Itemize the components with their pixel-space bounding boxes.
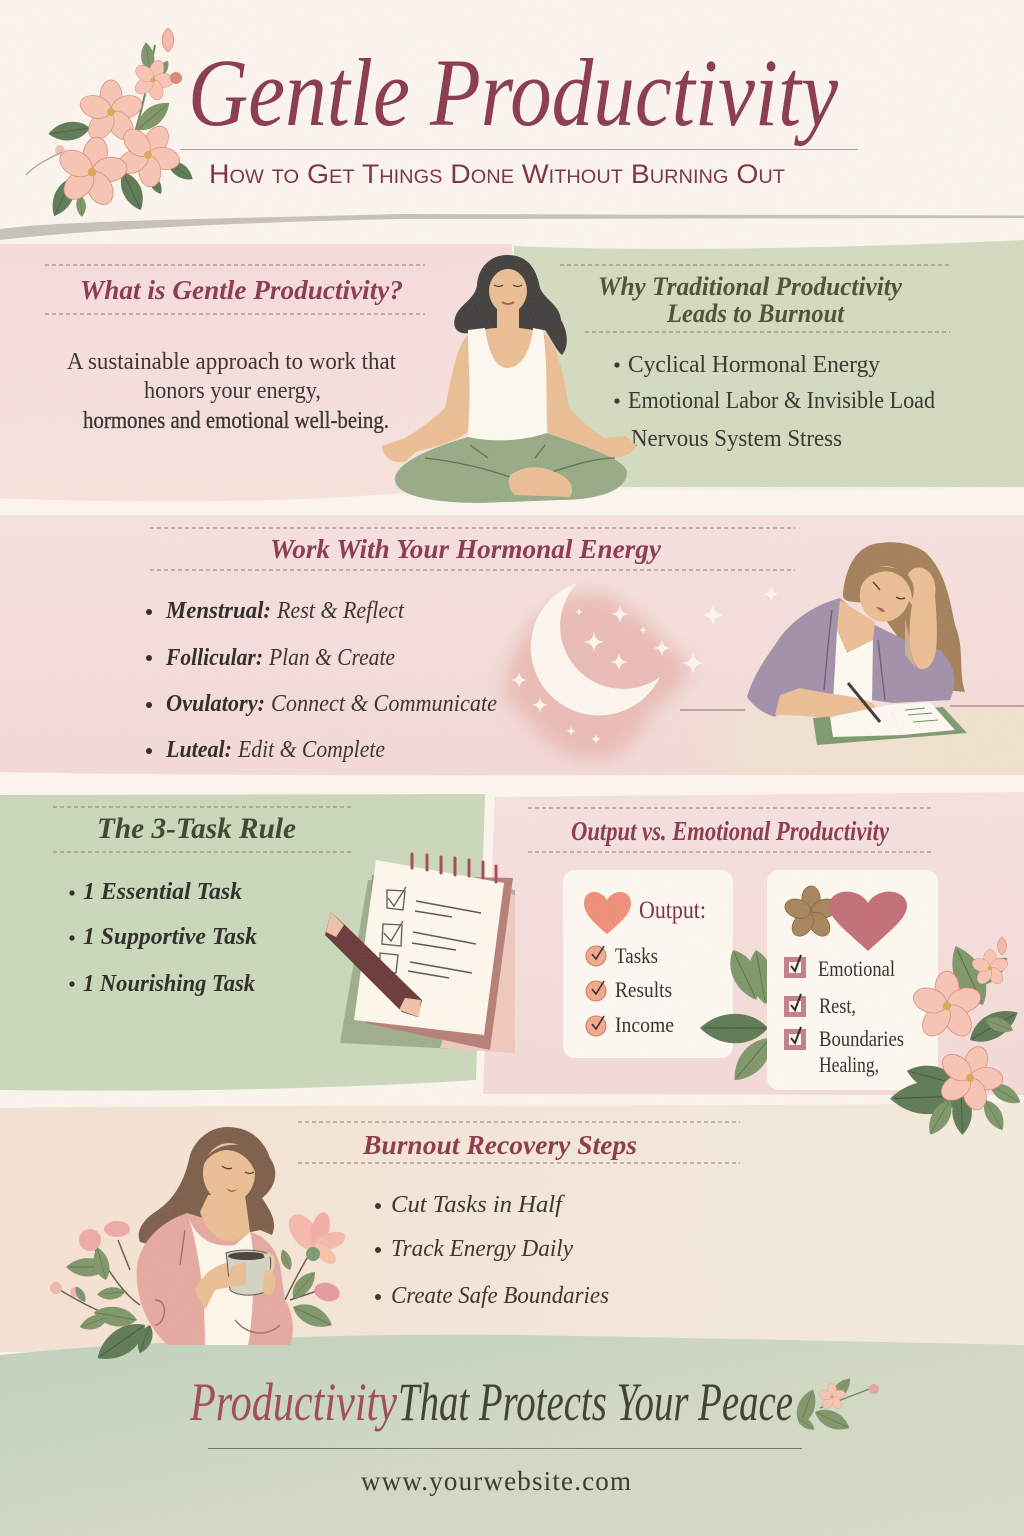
heading: why traditional productivity leads to burnout: Why Traditional Productivity: [598, 272, 902, 301]
list: recovery steps: [375, 1192, 609, 1309]
text block: definition: honors your energy,: [144, 378, 321, 404]
right botanicals: [278, 1209, 348, 1333]
list: cycle phases: Menstrual:: [165, 598, 271, 624]
card: emotional: Boundaries: [819, 1026, 904, 1051]
heading: why traditional productivity leads to burnout: Leads to Burnout: [666, 299, 845, 328]
list: recovery steps: Create Safe Boundaries: [391, 1283, 609, 1309]
list: cycle phases: Connect & Communicate: [271, 691, 497, 717]
closing tagline: Productivity: [189, 1372, 397, 1432]
heading: hormonal energy: Work With Your Hormonal Energy: [270, 534, 662, 564]
list: burnout causes: Cyclical Hormonal Energy: [628, 352, 880, 378]
list: burnout causes: Nervous System Stress: [631, 426, 842, 452]
illustration: moon and stars: [504, 583, 779, 761]
header: [0, 28, 1024, 240]
heading: why traditional productivity leads to burnout: [560, 265, 950, 332]
subtitle: How to Get Things Done Without Burning Out: [209, 159, 785, 189]
list: three tasks: 1 Essential Task: [83, 879, 242, 905]
list: three tasks: 1 Supportive Task: [83, 924, 257, 950]
list: recovery steps: Cut Tasks in Half: [391, 1192, 565, 1218]
heading: what is gentle productivity: What is Gentle Productivity?: [80, 275, 403, 305]
card: output: [563, 870, 733, 1058]
illustration: floral cluster bottom right of cards: [889, 937, 1024, 1139]
title: [188, 39, 838, 146]
title: Productivity: [429, 39, 838, 146]
list: cycle phases: Luteal:: [165, 737, 232, 763]
list: cycle phases: Edit & Complete: [237, 737, 385, 763]
list: cycle phases: [146, 598, 497, 763]
illustration: tired woman writing in a notebook: [680, 542, 1024, 745]
list: three tasks: 1 Nourishing Task: [83, 971, 255, 997]
illustration: meditating woman: [382, 255, 636, 503]
heading: burnout recovery steps: Burnout Recovery Steps: [362, 1130, 637, 1160]
card: output: Output:: [639, 897, 706, 924]
card: emotional: Healing,: [819, 1052, 879, 1077]
left botanicals: [50, 1221, 156, 1369]
list: burnout causes: Emotional Labor & Invisible Load: [628, 388, 935, 414]
icon: coral heart: [584, 892, 631, 934]
list: cycle phases: Ovulatory:: [166, 691, 265, 717]
footer panel: [0, 1335, 1024, 1536]
list: three tasks: [69, 879, 257, 997]
card: output: Income: [615, 1012, 674, 1037]
closing tagline: That Protects Your Peace: [398, 1372, 793, 1432]
icon: leaves between cards: [700, 945, 779, 1088]
panel: output vs emotional productivity: [483, 792, 1024, 1095]
icon: footer flower sprig: [792, 1375, 879, 1435]
list: recovery steps: Track Energy Daily: [391, 1236, 573, 1262]
card: output: Results: [615, 977, 672, 1002]
icon: rose heart: [829, 892, 907, 951]
heading: output vs emotional productivity: Output vs. Emotional Productivity: [571, 816, 890, 846]
text block: definition: [67, 349, 396, 434]
panel: work with your hormonal energy: [0, 515, 1024, 796]
illustration: woman with coffee and flowers: [50, 1127, 348, 1369]
panel: burnout recovery steps: [0, 1103, 1024, 1352]
card: output: Tasks: [615, 943, 658, 968]
card: emotional: Rest,: [819, 993, 856, 1018]
card: emotional: Emotional: [818, 956, 895, 981]
text block: definition: A sustainable approach to work that: [67, 349, 396, 375]
list: cycle phases: Rest & Reflect: [276, 598, 405, 624]
list: burnout causes: [614, 352, 935, 452]
icon: floral cluster top left: [26, 28, 196, 220]
icon: brown flower: [782, 886, 840, 940]
title: Gentle: [188, 39, 410, 146]
panel: what is gentle productivity and why burnout: [0, 240, 1024, 514]
text block: definition: hormones and emotional well-being.: [83, 408, 389, 434]
panel: the 3-task rule: [0, 794, 485, 1091]
card: emotional: [767, 870, 938, 1090]
list: cycle phases: Follicular:: [165, 645, 263, 671]
footer: [189, 1372, 879, 1496]
heading: the 3-task rule: The 3-Task Rule: [97, 812, 296, 845]
illustration: checklist notepad and pencil: [325, 854, 515, 1053]
website url: www.yourwebsite.com: [361, 1466, 631, 1496]
closing tagline: [189, 1372, 793, 1432]
list: cycle phases: Plan & Create: [268, 645, 395, 671]
